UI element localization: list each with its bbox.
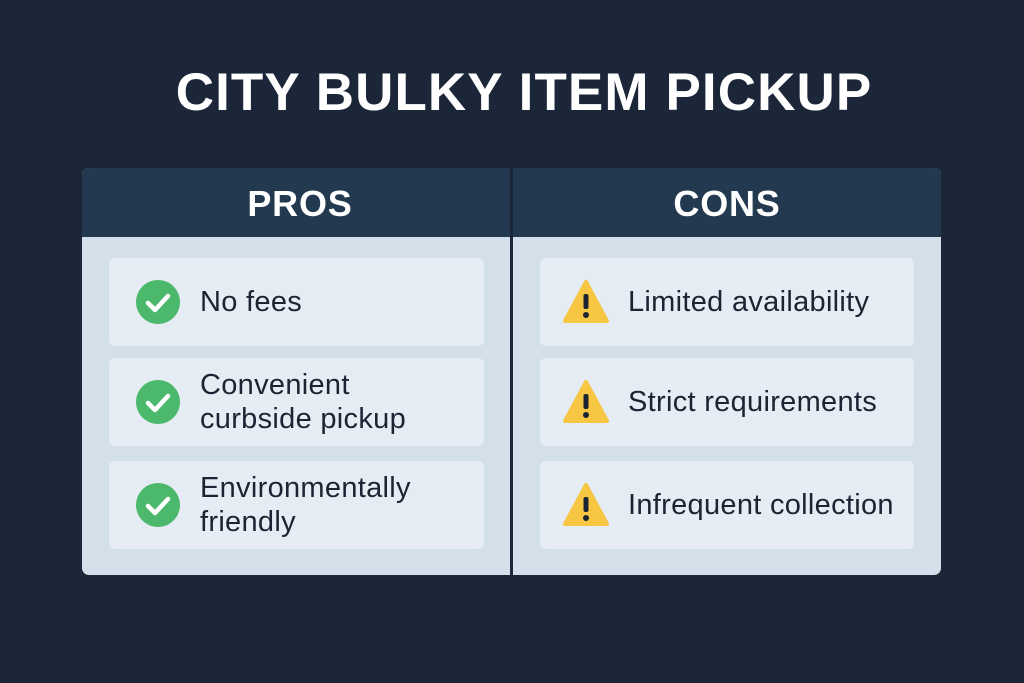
icon: warning (563, 482, 610, 526)
pros card 2: curbside pickup (200, 403, 406, 435)
icon: check (136, 380, 180, 424)
icon: check (136, 483, 180, 527)
pros card 1: No fees (200, 286, 302, 318)
cons card 2: Strict requirements (628, 386, 877, 418)
table (82, 168, 941, 575)
title: CITY BULKY ITEM PICKUP (176, 63, 872, 122)
pros card 3: Environmentally (200, 472, 411, 504)
icon: warning (563, 380, 610, 423)
pros card 1 (109, 258, 484, 346)
cons card 1: Limited availability (628, 286, 869, 318)
header: pros (82, 168, 510, 237)
cons card 2 (540, 358, 914, 446)
header: cons: CONS (673, 183, 781, 224)
pros card 2: Convenient (200, 369, 350, 401)
cons card 3 (540, 461, 914, 549)
icon: warning (563, 280, 610, 323)
pros card 2 (109, 358, 484, 446)
cons card 3: Infrequent collection (628, 489, 894, 521)
pros card 3: friendly (200, 506, 296, 538)
icon: check (136, 280, 180, 324)
cons card 1 (540, 258, 914, 346)
pros card 3 (109, 461, 484, 549)
header: pros: PROS (247, 183, 353, 224)
divider (510, 168, 513, 575)
header: cons (513, 168, 941, 237)
